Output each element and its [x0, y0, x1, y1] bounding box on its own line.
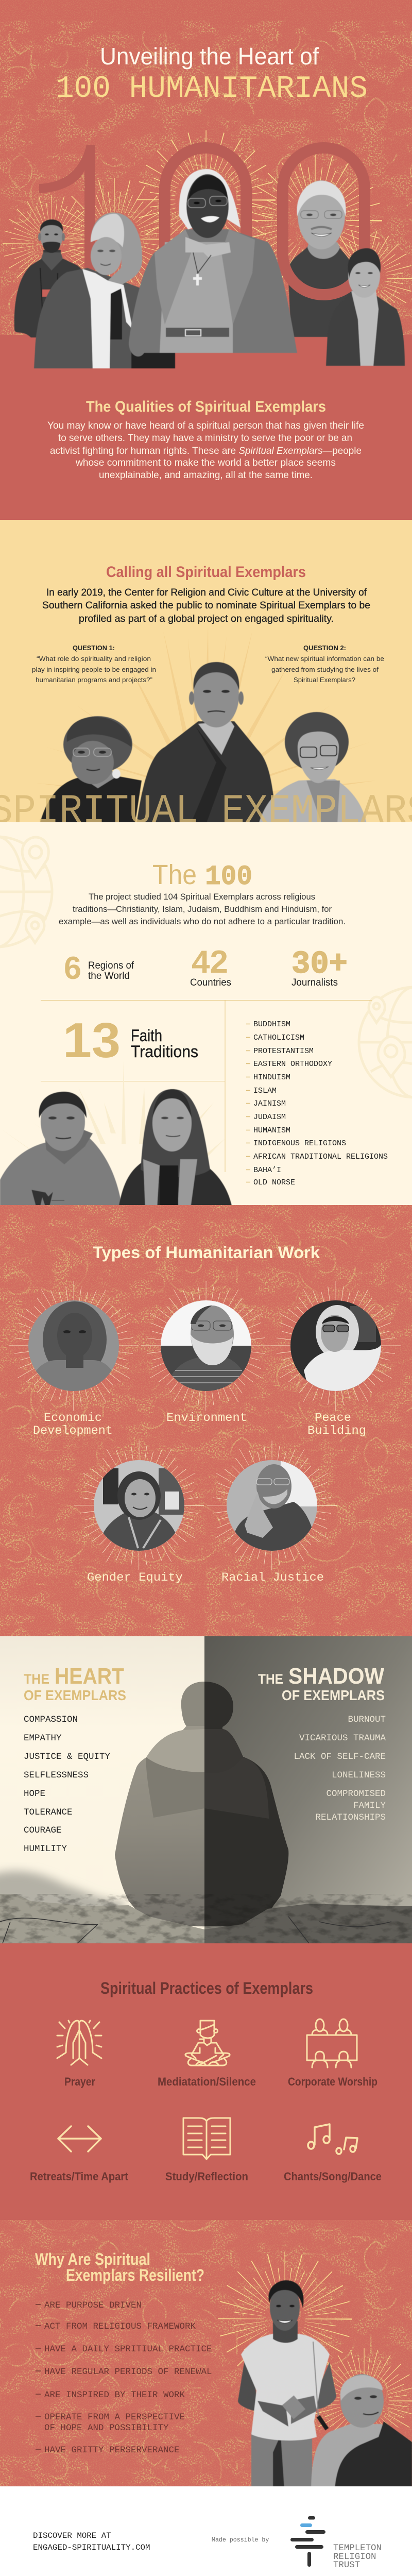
discover more link: DISCOVER MORE AT	[33, 2531, 111, 2540]
question 1: humanitarian programs and projects?”	[36, 676, 152, 684]
panel: the 100	[0, 822, 412, 1212]
portrait: woman in headscarf	[34, 213, 175, 368]
stat: faith traditions: Faith	[131, 1026, 162, 1045]
type: racial justice: Racial Justice	[221, 1571, 324, 1585]
type: economic development: Economic	[44, 1411, 102, 1425]
type: racial justice	[217, 1450, 327, 1585]
list of faith traditions: OLD NORSE	[253, 1178, 295, 1187]
question 2: “What new spiritual information can be	[265, 655, 384, 663]
list: shadow qualities: LONELINESS	[332, 1770, 386, 1781]
list: shadow qualities: FAMILY	[353, 1801, 386, 1811]
label: Chants/Song/Dance	[284, 2170, 382, 2183]
list of resilience reasons: OPERATE FROM A PERSPECTIVE	[44, 2412, 185, 2422]
icon: music notes	[308, 2124, 357, 2154]
list of resilience reasons: ACT FROM RELIGIOUS FRAMEWORK	[44, 2321, 196, 2332]
text block: You may know or have heard of a spiritual person that has given their life	[47, 420, 364, 431]
type: peace building	[281, 1291, 391, 1438]
label: Study/Reflection	[165, 2170, 248, 2183]
list: heart qualities	[24, 1715, 111, 1854]
label: Corporate Worship	[288, 2075, 377, 2088]
list: shadow qualities	[294, 1715, 386, 1823]
heading: the shadow of exemplars	[258, 1664, 385, 1703]
label: Mediatation/Silence	[158, 2075, 256, 2088]
heading: the heart of exemplars: THE	[24, 1671, 49, 1687]
stat: countries: 42	[192, 944, 228, 980]
list of faith traditions: JAINISM	[253, 1099, 286, 1108]
stat: faith traditions: Traditions	[131, 1042, 198, 1061]
question 1: “What role do spirituality and religion	[37, 655, 151, 663]
heading: Exemplars Resilient?	[66, 2266, 204, 2284]
type: peace building: Peace	[315, 1411, 351, 1425]
stat: regions: the World	[88, 971, 130, 981]
list: heart qualities: JUSTICE & EQUITY	[24, 1752, 111, 1762]
panel: spiritual practices	[0, 1943, 412, 2220]
discover more link	[33, 2531, 150, 2552]
portrait: woman with braids	[238, 2280, 336, 2488]
stat: journalists: 30+	[291, 946, 348, 982]
heading: the shadow of exemplars: THE	[258, 1671, 283, 1687]
list: shadow qualities: LACK OF SELF-CARE	[294, 1752, 386, 1762]
icon: left globe and pins	[0, 837, 53, 947]
type: environment	[151, 1291, 261, 1425]
portrait: nun	[129, 169, 297, 357]
logo: templeton religion trust: RELIGION	[333, 2552, 376, 2562]
title: Unveiling the Heart of	[100, 43, 319, 70]
text block: example—as well as individuals who do not adhere to a particular tradition.	[59, 917, 346, 926]
stat: regions: Regions of	[88, 960, 134, 971]
panel: hero background	[0, 0, 412, 520]
list: heart qualities: SELFLESSNESS	[24, 1770, 89, 1781]
icon: open book	[183, 2118, 230, 2159]
faint sunburst	[36, 626, 376, 799]
text block: to serve others. They may have a ministry to serve the poor or be an	[58, 433, 352, 444]
list: heart qualities: HUMILITY	[24, 1844, 67, 1854]
portrait: monk	[136, 662, 277, 824]
heading	[152, 859, 252, 893]
type: economic development	[19, 1291, 129, 1438]
logo: templeton religion trust	[290, 2516, 382, 2570]
heading: Why Are Spiritual	[35, 2250, 150, 2268]
list of resilience reasons	[36, 2300, 212, 2455]
list of faith traditions: BAHA’I	[253, 1166, 281, 1175]
text block: unexplainable, and amazing, all at the same time.	[99, 470, 313, 481]
stat: faith traditions	[63, 1013, 198, 1068]
icon: prayer	[57, 2021, 101, 2065]
heading: the heart of exemplars: OF EXEMPLARS	[24, 1687, 126, 1703]
list of faith traditions: CATHOLICISM	[253, 1033, 304, 1042]
discover more link: ENGAGED-SPIRITUALITY.COM	[33, 2543, 150, 2552]
type: gender equity: Gender Equity	[87, 1571, 183, 1585]
icon: retreats arrows	[58, 2126, 101, 2151]
heading	[35, 2250, 204, 2284]
portrait: man in coat	[14, 219, 84, 337]
intro text: profiled as part of a global project on engaged spirituality.	[79, 614, 334, 624]
heading: Spiritual Practices of Exemplars	[100, 1979, 313, 1997]
panel: the heart and the shadow	[0, 1636, 412, 1943]
portrait: monk with robe	[311, 2374, 412, 2488]
question 2: gathered from studying the lives of	[271, 666, 379, 673]
title	[56, 43, 368, 107]
stat: faith traditions: 13	[63, 1013, 121, 1068]
icon: meditation	[185, 2021, 230, 2065]
title: 100 HUMANITARIANS	[56, 72, 368, 107]
portrait: older man in sweater	[288, 180, 355, 337]
figure seen from behind: dark half	[115, 1682, 288, 1926]
rock wall	[0, 1894, 412, 1943]
list of faith traditions: AFRICAN TRADITIONAL RELIGIONS	[253, 1153, 388, 1161]
intro text: Southern California asked the public to nominate Spiritual Exemplars to be	[42, 600, 370, 611]
list of faith traditions: EASTERN ORTHODOXY	[253, 1060, 332, 1069]
heading: 100	[205, 861, 252, 893]
list of faith traditions: BUDDHISM	[253, 1020, 290, 1029]
text block	[59, 892, 346, 926]
portrait: man in hoodie	[0, 1092, 122, 1208]
sunburst rays behind portraits	[18, 149, 400, 314]
list of faith traditions: ISLAM	[253, 1087, 277, 1095]
list of faith traditions: HUMANISM	[253, 1126, 290, 1135]
panel: footer	[0, 2486, 412, 2576]
figure seen from behind: light half	[115, 1682, 288, 1926]
large numeral second 0	[283, 148, 365, 295]
stat: regions: 6	[64, 951, 81, 986]
list of resilience reasons: OF HOPE AND POSSIBILITY	[44, 2423, 169, 2433]
label: Retreats/Time Apart	[30, 2170, 129, 2183]
heading: Calling all Spiritual Exemplars	[106, 564, 306, 581]
text block: traditions—Christianity, Islam, Judaism, Buddhism and Hinduism, for	[73, 904, 332, 914]
portrait: woman with short hair	[326, 248, 405, 366]
text block: The project studied 104 Spiritual Exemplars across religious	[89, 892, 315, 902]
text block: whose commitment to make the world a better place seems	[75, 457, 336, 468]
portrait: woman with glasses	[259, 712, 367, 824]
panel: calling all spiritual exemplars	[0, 520, 412, 835]
fog hill	[0, 1871, 124, 1917]
type: economic development: Development	[33, 1424, 113, 1438]
question 2	[265, 644, 384, 684]
heading: Types of Humanitarian Work	[93, 1243, 320, 1262]
list: heart qualities: COURAGE	[24, 1825, 62, 1836]
list of resilience reasons: HAVE A DAILY SPRITIUAL PRACTICE	[44, 2344, 212, 2354]
panel: types of humanitarian work	[0, 1205, 412, 1636]
logo: templeton religion trust: TRUST	[333, 2561, 360, 2570]
heading: The Qualities of Spiritual Exemplars	[86, 398, 326, 415]
icon: right globe and pins	[358, 987, 412, 1097]
stat: regions	[64, 951, 134, 986]
stat: countries	[190, 944, 231, 988]
heading: the shadow of exemplars: SHADOW	[288, 1664, 384, 1689]
portrait: woman with head wrap	[40, 716, 142, 824]
question 2: Spiritual Exemplars?	[294, 676, 355, 684]
stat: journalists: Journalists	[291, 977, 338, 988]
type: peace building: Building	[307, 1424, 366, 1438]
type: environment: Environment	[166, 1411, 247, 1425]
made possible by: Made possible by	[212, 2537, 269, 2544]
list: heart qualities: EMPATHY	[24, 1733, 62, 1743]
logo: templeton religion trust: TEMPLETON	[333, 2544, 382, 2553]
question 1	[32, 644, 156, 684]
list of faith traditions: JUDAISM	[253, 1113, 286, 1122]
heading: the heart of exemplars: HEART	[55, 1664, 124, 1689]
list of faith traditions	[246, 1020, 388, 1187]
heading: The	[152, 859, 197, 890]
list: shadow qualities: COMPROMISED	[326, 1789, 386, 1799]
list: shadow qualities: VICARIOUS TRAUMA	[299, 1733, 386, 1743]
portrait: woman with patterned scarf	[118, 1089, 232, 1212]
text block: activist fighting for human rights. These are Spiritual Exemplars—people	[50, 446, 362, 456]
list: heart qualities: TOLERANCE	[24, 1807, 73, 1818]
stat: countries: Countries	[190, 977, 231, 988]
question 1: QUESTION 1:	[73, 644, 115, 652]
intro text: In early 2019, the Center for Religion and Civic Culture at the University of	[46, 587, 367, 598]
heading: the shadow of exemplars: OF EXEMPLARS	[282, 1687, 385, 1703]
list: heart qualities: COMPASSION	[24, 1715, 78, 1725]
question 2: QUESTION 2:	[303, 644, 346, 652]
large numeral 1 and first 0	[39, 145, 246, 335]
list of faith traditions: INDIGENOUS RELIGIONS	[253, 1139, 346, 1148]
faint sunburst	[0, 1061, 225, 1185]
list of resilience reasons: HAVE REGULAR PERIODS OF RENEWAL	[44, 2367, 212, 2377]
intro text	[42, 587, 370, 624]
question 1: play in inspiring people to be engaged in	[32, 666, 156, 673]
panel: qualities of spiritual exemplars	[47, 398, 364, 481]
list: shadow qualities: BURNOUT	[348, 1715, 386, 1725]
panel: why are spiritual exemplars resilient	[0, 2220, 412, 2488]
list of faith traditions: HINDUISM	[253, 1073, 290, 1082]
list of faith traditions: PROTESTANTISM	[253, 1047, 314, 1056]
text block	[47, 420, 364, 481]
list of resilience reasons: ARE PURPOSE DRIVEN	[44, 2300, 142, 2311]
list: shadow qualities: RELATIONSHIPS	[315, 1812, 386, 1823]
list of resilience reasons: HAVE GRITTY PERSERVERANCE	[44, 2445, 180, 2455]
label: Prayer	[64, 2075, 95, 2088]
type: gender equity	[84, 1450, 194, 1585]
heading: the heart of exemplars	[24, 1664, 126, 1703]
list of resilience reasons: ARE INSPIRED BY THEIR WORK	[44, 2390, 185, 2400]
icon: corporate worship	[307, 2019, 357, 2067]
sunburst rays	[241, 2275, 403, 2439]
list: heart qualities: HOPE	[24, 1789, 45, 1799]
